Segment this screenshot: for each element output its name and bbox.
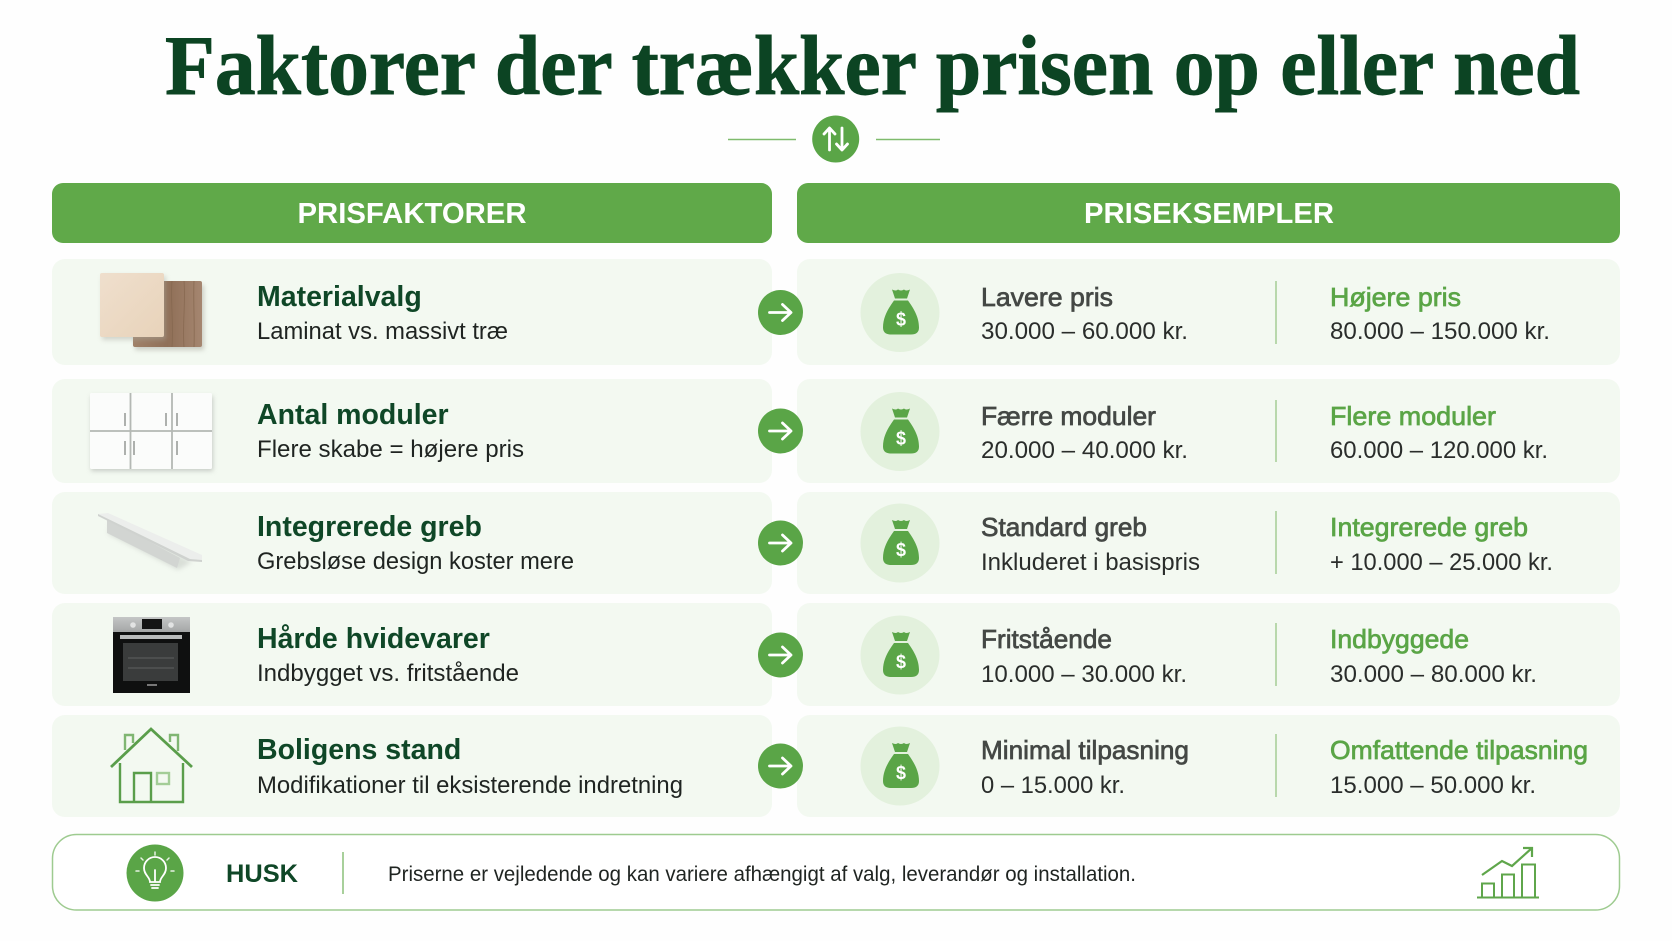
panel: boligens stand prices [797, 715, 1620, 817]
text: hårde hvidevarer: Indbygget vs. fritstående [257, 660, 519, 687]
label: husk: HUSK [226, 860, 298, 888]
text: omfattende tilpasning: Omfattende tilpasning [1330, 735, 1588, 765]
icon: money bag [860, 504, 940, 582]
text: omfattende tilpasning [1330, 735, 1588, 799]
text: boligens stand: Boligens stand [257, 734, 461, 766]
icon: money bag [860, 726, 940, 806]
text: antal moduler: Flere skabe = højere pris [257, 436, 524, 463]
text: lavere pris [981, 282, 1188, 345]
panel: materialvalg factor [52, 259, 772, 365]
arrow: integrerede greb [758, 520, 803, 566]
text: materialvalg: Laminat vs. massivt træ [257, 318, 508, 345]
text: færre moduler: 20.000 – 40.000 kr. [981, 437, 1188, 464]
panel: integrerede greb factor [52, 492, 772, 594]
text: fritstående: Fritstående [981, 624, 1112, 654]
arrow: boligens stand [758, 744, 803, 788]
panel: moduler prices [797, 379, 1620, 483]
panel: greb prices [797, 492, 1620, 594]
icon: integrated handle [98, 513, 202, 570]
text: integrerede greb price: + 10.000 – 25.000 kr. [1330, 549, 1553, 576]
text: højere pris: 80.000 – 150.000 kr. [1330, 318, 1550, 345]
text: indbyggede: Indbyggede [1330, 624, 1469, 654]
text: indbyggede [1330, 624, 1537, 688]
text: fritstående: 10.000 – 30.000 kr. [981, 661, 1187, 688]
text: lavere pris: Lavere pris [981, 282, 1113, 312]
icon: light bulb [126, 844, 184, 902]
text: antal moduler [257, 399, 524, 463]
text: boligens stand [257, 734, 683, 799]
heading: prisfaktorer: PRISFAKTORER [298, 198, 527, 230]
text: antal moduler: Antal moduler [257, 399, 449, 431]
icon: up and down arrows with divider [728, 116, 940, 162]
text: flere moduler: 60.000 – 120.000 kr. [1330, 437, 1548, 464]
text: minimal tilpasning [981, 735, 1189, 799]
text: flere moduler: Flere moduler [1330, 401, 1496, 431]
panel: boligens stand factor [52, 715, 772, 817]
heading: prisfaktorer [52, 183, 772, 243]
text: højere pris [1330, 282, 1550, 345]
text: lavere pris: 30.000 – 60.000 kr. [981, 318, 1188, 345]
text: færre moduler: Færre moduler [981, 401, 1156, 431]
text: materialvalg: Materialvalg [257, 281, 422, 313]
text: fritstående [981, 624, 1187, 688]
text: flere moduler [1330, 401, 1548, 464]
text: minimal tilpasning: Minimal tilpasning [981, 735, 1189, 765]
text: højere pris: Højere pris [1330, 282, 1461, 312]
panel: antal moduler factor [52, 379, 772, 483]
text: standard greb: Inkluderet i basispris [981, 549, 1200, 576]
text: færre moduler [981, 401, 1188, 464]
heading: priseksempler [797, 183, 1620, 243]
text: integrerede greb price [1330, 512, 1553, 576]
text: hårde hvidevarer: Hårde hvidevarer [257, 623, 490, 655]
heading: priseksempler: PRISEKSEMPLER [1084, 198, 1334, 230]
icon: money bag [860, 392, 940, 471]
icon: material samples [100, 273, 204, 350]
icon: money bag [860, 616, 940, 694]
panel: hårde hvidevarer factor [52, 603, 772, 706]
icon: money bag [860, 273, 940, 352]
panel: hvidevarer prices [797, 603, 1620, 706]
text: integrerede greb price: Integrerede greb [1330, 512, 1528, 542]
text: hårde hvidevarer [257, 623, 519, 687]
icon: money bag: $ [896, 428, 906, 450]
title: Faktorer der trækker prisen op eller ned [165, 19, 1580, 113]
text: standard greb: Standard greb [981, 512, 1147, 542]
icon: growth chart [1477, 848, 1539, 898]
text: omfattende tilpasning: 15.000 – 50.000 kr. [1330, 772, 1536, 799]
arrow: materialvalg [758, 290, 803, 335]
text: minimal tilpasning: 0 – 15.000 kr. [981, 772, 1125, 799]
text: integrerede greb: Grebsløse design koster mere [257, 548, 574, 575]
text: boligens stand: Modifikationer til eksisterende indretning [257, 772, 683, 799]
callout: husk [52, 834, 1620, 910]
arrow: antal moduler [758, 408, 803, 454]
icon: house [111, 729, 192, 802]
text: indbyggede: 30.000 – 80.000 kr. [1330, 661, 1537, 688]
arrow: hårde hvidevarer [758, 632, 803, 678]
panel: materialvalg prices [797, 259, 1620, 365]
text: standard greb [981, 512, 1200, 576]
text: materialvalg [257, 281, 508, 345]
icon: oven [113, 617, 190, 693]
text: integrerede greb [257, 511, 574, 575]
icon: cabinets [90, 393, 213, 471]
text: note: Priserne er vejledende og kan variere afhængigt af valg, leverandør og installation. [388, 863, 1136, 886]
icon: money bag: $ [896, 763, 906, 784]
icon: money bag: $ [896, 540, 906, 561]
icon: money bag: $ [896, 310, 906, 330]
text: integrerede greb: Integrerede greb [257, 511, 482, 543]
icon: money bag: $ [896, 652, 906, 673]
